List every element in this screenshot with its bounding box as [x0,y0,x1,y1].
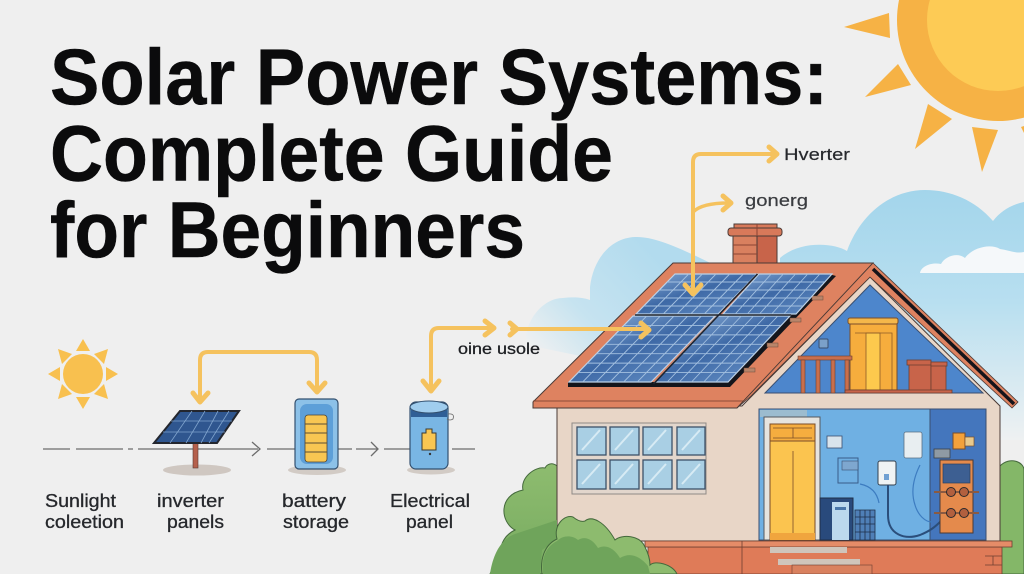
label: oine usole: oine usole [458,341,540,358]
label: Electrical panel: Electrical [390,490,470,511]
electrical panel [934,433,979,533]
front bush [490,517,677,574]
attic railing [798,356,852,393]
label: Sunlight collection [45,490,124,532]
icon: battery [288,399,346,475]
label: battery storage [282,490,349,532]
door [764,417,820,540]
clouds behind house [526,190,1024,440]
title [50,32,828,274]
label: inverter panels [157,490,224,532]
title: Solar Power Systems: [50,32,828,121]
foundation and steps [645,541,1012,574]
process line [43,442,475,456]
cable [888,485,941,537]
attic [765,285,983,393]
home battery [820,498,875,540]
bushes behind house [490,461,1024,574]
attic tank [848,318,898,390]
gable roof edge [737,263,1018,408]
house [533,263,1018,574]
rooftop solar array [568,274,836,387]
label: Hverter: Hverter [784,146,851,164]
label: gonerg: gonerg [745,192,808,210]
label: Sunlight collection: Sunlight [45,490,116,511]
chimney [728,224,782,264]
icon: solar panel [154,411,239,476]
label: Sunlight collection: coleetion [45,511,124,532]
icon: large sun [844,0,1024,172]
arrow: panels to battery [193,352,325,402]
label: Electrical panel: panel [406,511,453,532]
label: battery storage: storage [283,511,349,532]
wall devices [827,432,922,485]
main roof [533,263,873,408]
arrow: electrical panel to roof [423,321,649,391]
icon: small sun [48,339,118,409]
house walls [557,277,1000,541]
title: for Beginners [50,185,525,274]
window [572,423,706,494]
label: inverter panels: panels [167,511,224,532]
arrow: to Hverter [685,147,777,294]
title: Complete Guide [50,108,613,198]
white cloud [920,246,1024,273]
label: Electrical panel [390,490,470,532]
label: battery storage: battery [282,490,347,511]
attic pots [845,360,952,393]
label: inverter panels: inverter [157,490,224,511]
icon: electrical panel cylinder [407,401,455,474]
room interior [759,409,986,540]
